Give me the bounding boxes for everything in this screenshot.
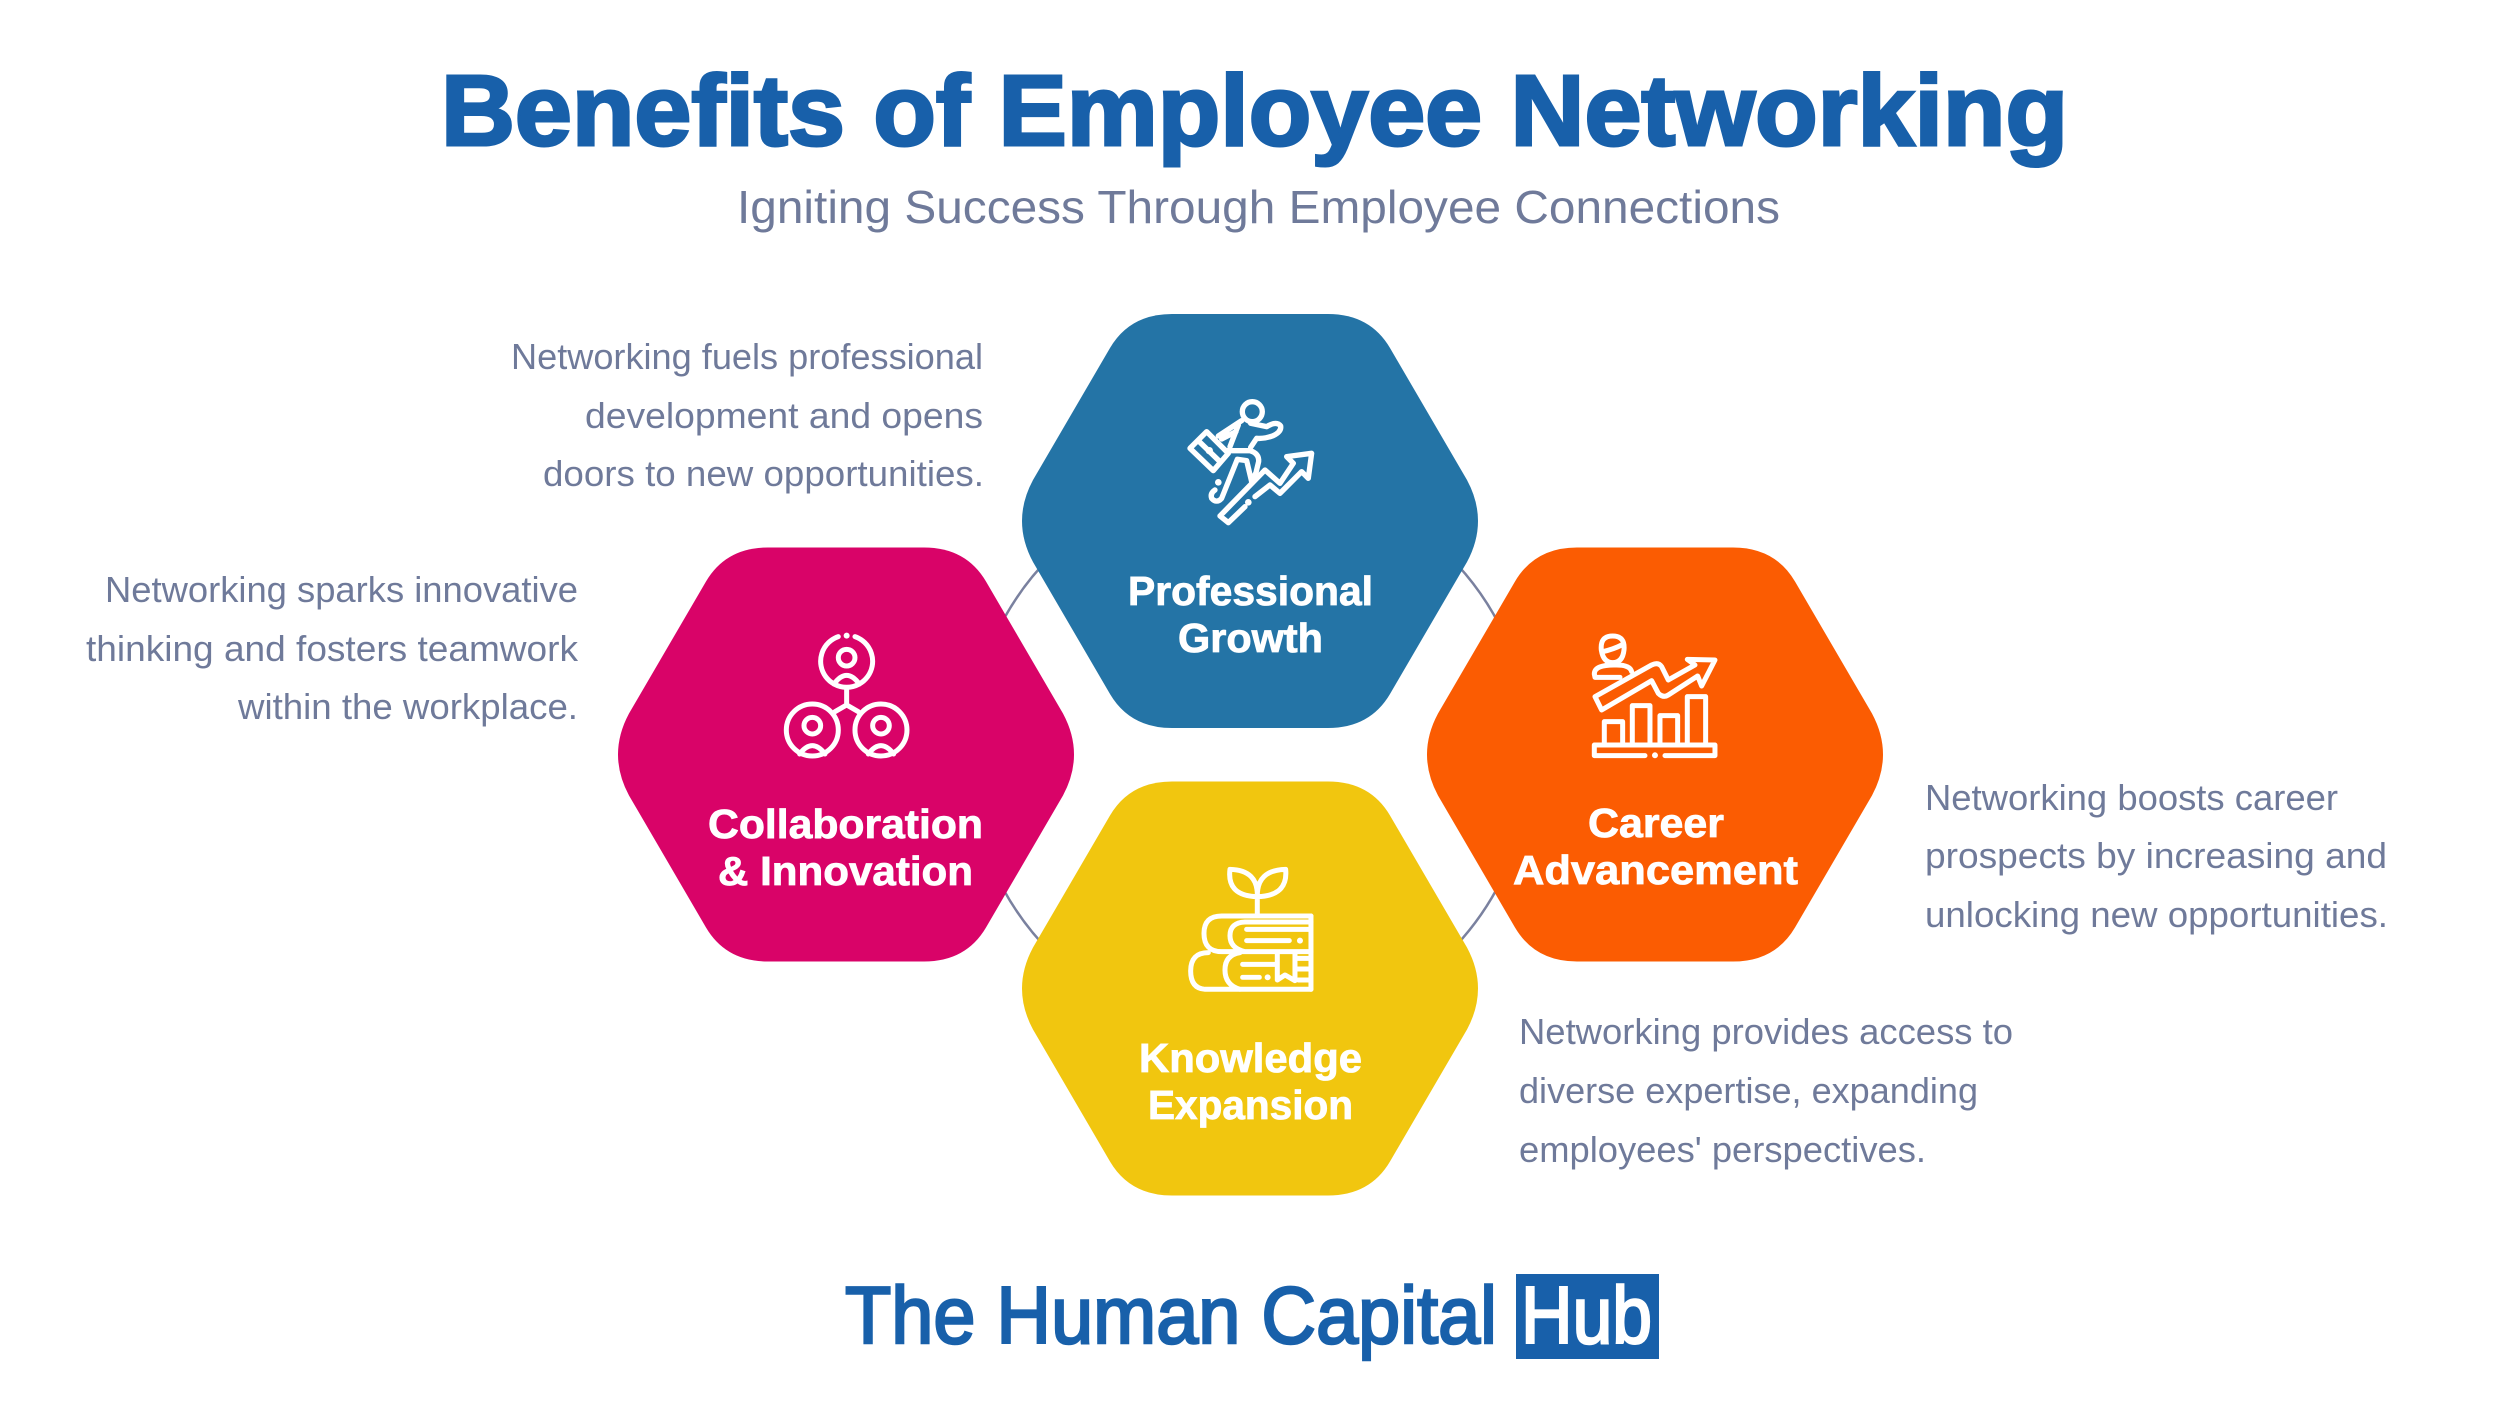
label: professional growth	[1128, 568, 1373, 661]
text block: career description	[1925, 777, 2388, 935]
text block: knowledge description: employees' perspectives.	[1519, 1129, 1926, 1170]
logo badge text: Hub	[1521, 1271, 1652, 1361]
panel: professional growth	[1022, 314, 1478, 728]
label: knowledge expansion: Expansion	[1148, 1082, 1353, 1128]
text block: professional growth description: Networking fuels professional	[511, 336, 983, 377]
hexagon: professional growth	[1022, 314, 1478, 728]
logo badge	[1516, 1274, 1659, 1359]
text block: collaboration description: thinking and fosters teamwork	[86, 628, 579, 669]
icon: person with rising chart	[1594, 636, 1715, 758]
text block: collaboration description	[86, 569, 579, 727]
label: collaboration and innovation	[708, 801, 983, 894]
text block: knowledge description: diverse expertise, expanding	[1519, 1070, 1978, 1111]
label: career advancement: Advancement	[1513, 847, 1798, 893]
connecting ring behind hexagons	[969, 474, 1531, 1036]
panel: knowledge expansion	[1022, 782, 1478, 1196]
text block: knowledge description: Networking provides access to	[1519, 1011, 2013, 1052]
subtitle: Igniting Success Through Employee Connections	[737, 181, 1780, 233]
text block: professional growth description: development and opens	[585, 395, 983, 436]
label: professional growth: Professional	[1128, 568, 1373, 614]
text block: collaboration description: within the workplace.	[237, 686, 578, 727]
label: knowledge expansion: Knowledge	[1139, 1035, 1362, 1081]
label: professional growth: Growth	[1178, 615, 1323, 661]
logo wordmark: The Human Capital	[845, 1271, 1497, 1361]
logo: The Human Capital Hub	[845, 1271, 1659, 1361]
icon: books with sprout	[1191, 869, 1311, 989]
text block: professional growth description: doors to new opportunities.	[543, 453, 984, 494]
text block: career description: prospects by increasing and	[1925, 835, 2387, 876]
hexagon: career advancement	[1427, 548, 1883, 962]
label: knowledge expansion	[1139, 1035, 1362, 1128]
panel: collaboration and innovation	[618, 548, 1074, 962]
icon: climbing businessman	[1190, 402, 1312, 523]
hexagon: knowledge expansion	[1022, 782, 1478, 1196]
text block: professional growth description	[511, 336, 984, 494]
text block: knowledge description	[1519, 1011, 2013, 1170]
icon: connected people	[786, 633, 907, 756]
text block: career description: Networking boosts career	[1925, 777, 2338, 818]
text block: collaboration description: Networking sparks innovative	[105, 569, 578, 610]
label: career advancement	[1513, 800, 1798, 893]
label: career advancement: Career	[1588, 800, 1724, 846]
label: collaboration and innovation: & Innovation	[718, 848, 973, 894]
label: collaboration and innovation: Collaboration	[708, 801, 983, 847]
title: Benefits of Employee Networking	[441, 55, 2068, 167]
hexagon: collaboration and innovation	[618, 548, 1074, 962]
panel: career advancement	[1427, 548, 1883, 962]
text block: career description: unlocking new opportunities.	[1925, 894, 2388, 935]
